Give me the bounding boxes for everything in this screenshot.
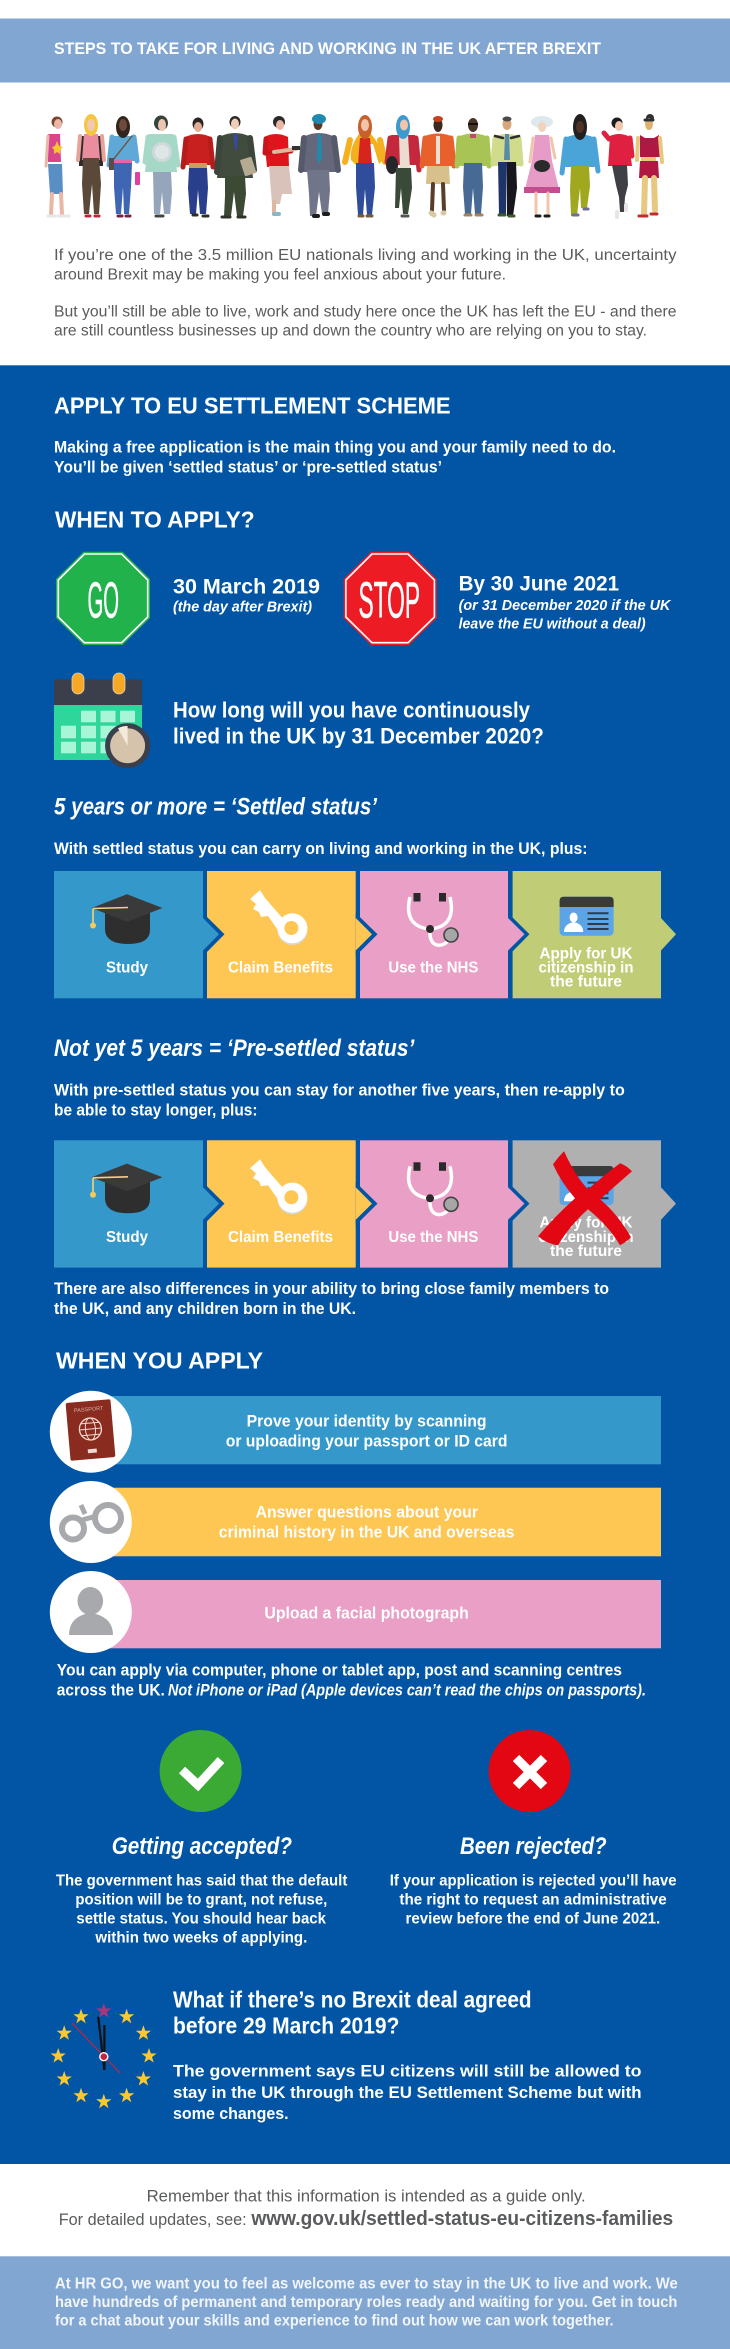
text: how long question [173,697,544,748]
icon: red cross [538,1151,632,1245]
panel: been rejected: If your application is rejected you’ll have [390,1873,677,1890]
text: family differences: There are also differences in your ability to bring close family members to [54,1280,609,1298]
footer banner: have hundreds of permanent and temporary roles ready and waiting for you. Get in touch [55,2294,677,2311]
intro text [54,247,677,340]
text: guide disclaimer: www.gov.uk/settled-status-eu-citizens-families [250,2208,673,2230]
panel: getting accepted: The government has said that the default [56,1873,347,1890]
icon: EU stars clock [51,2003,157,2108]
box: study [54,871,203,998]
step: facial photograph [50,1571,661,1653]
icon: stop sign: STOP [358,571,420,628]
text: pre-settled status intro [54,1081,625,1119]
step: criminal history: criminal history in the UK and overseas [219,1523,514,1541]
heading: no Brexit deal [173,1986,532,2038]
box: claim benefits [203,871,356,998]
heading: apply to EU settlement scheme: APPLY TO EU SETTLEMENT SCHEME [54,392,451,418]
box: claim benefits: Claim Benefits [228,1229,333,1246]
panel: blue main background [0,365,730,2164]
text: how long question: How long will you have continuously [173,697,531,722]
box: citizenship crossed out: citizenship in [538,1229,634,1246]
box: citizenship crossed out [508,1140,676,1268]
heading: pre-settled status: Not yet 5 years = ‘Pre-settled status’ [54,1035,415,1062]
text: pre-settled status intro: be able to stay longer, plus: [54,1101,258,1119]
icon: go sign: GO [88,571,119,628]
icon: calendar with clock [54,673,148,766]
box: use the NHS: Use the NHS [388,960,479,977]
panel: getting accepted: position will be to grant, not refuse, [75,1892,327,1909]
text: no deal explanation: The government says EU citizens will still be allowed to [173,2062,642,2081]
text: how long question: lived in the UK by 31 December 2020? [173,723,544,748]
text: family differences [54,1280,609,1318]
text: settled status intro: With settled status you can carry on living and working in the UK, plus: [54,840,588,858]
intro text: But you’ll still be able to live, work and study here once the UK has left the EU - and there [54,304,676,321]
box: claim benefits [203,1140,356,1268]
text: free application: Making a free application is the main thing you and your family need to do. [54,439,616,457]
text: how to apply: You can apply via computer, phone or tablet app, post and scanning centres [57,1662,622,1680]
text: pre-settled status intro: With pre-settled status you can stay for another five years, then re-apply to [54,1081,625,1099]
text: stop date: By 30 June 2021 [459,572,619,596]
text: how to apply: Not iPhone or iPad (Apple devices can’t read the chips on passports). [168,1682,646,1700]
box: citizenship crossed out: Apply for UK [540,1215,633,1232]
text: guide disclaimer: Remember that this information is intended as a guide only. [147,2188,586,2206]
icon: passport [66,1399,115,1461]
panel: getting accepted: within two weeks of applying. [94,1930,307,1947]
box: claim benefits: Claim Benefits [228,960,333,977]
heading: when to apply: WHEN TO APPLY? [55,507,255,533]
step: facial photograph: Upload a facial photograph [264,1604,469,1622]
text: free application [54,439,616,477]
box: citizenship crossed out: the future [550,1243,622,1260]
box: study: Study [106,960,148,977]
text: go date: (the day after Brexit) [173,599,312,616]
panel: pre-settled status benefits [54,1140,676,1268]
heading: no Brexit deal: before 29 March 2019? [173,2012,399,2038]
panel: been rejected: review before the end of June 2021. [406,1911,660,1928]
text: free application: You’ll be given ‘settled status’ or ‘pre-settled status’ [54,459,442,477]
text: stop date [459,572,672,632]
intro text: around Brexit may be making you feel anxious about your future. [54,266,506,283]
title banner: STEPS TO TAKE FOR LIVING AND WORKING IN THE UK AFTER BREXIT [54,39,602,58]
text: how to apply [57,1662,646,1700]
icon: red cross circle [489,1730,571,1812]
text: no deal explanation: stay in the UK through the EU Settlement Scheme but with [173,2083,642,2102]
box: use the NHS [356,871,508,998]
box: apply for citizenship: Apply for UK [540,945,633,962]
panel: getting accepted: settle status. You should hear back [76,1911,326,1928]
box: use the NHS [356,1140,508,1268]
footer banner [0,2256,730,2349]
text: no deal explanation: some changes. [173,2104,289,2123]
title banner [0,18,730,82]
heading: when you apply: WHEN YOU APPLY [56,1347,263,1373]
panel: getting accepted: Getting accepted? [112,1833,292,1860]
step: prove identity: Prove your identity by scanning [247,1413,487,1431]
panel: been rejected [390,1833,677,1928]
text: go date: 30 March 2019 [173,574,320,598]
illustration: row of diverse people [46,114,662,217]
step: prove identity [50,1391,661,1473]
icon: handcuffs [62,1505,121,1540]
text: guide disclaimer [59,2188,673,2230]
box: study: Study [106,1229,148,1246]
text: guide disclaimer: For detailed updates, see: [59,2211,247,2229]
box: apply for citizenship: the future [550,974,622,991]
heading: settled status: 5 years or more = ‘Settled status’ [54,794,377,821]
box: use the NHS: Use the NHS [388,1229,479,1246]
text: stop date: leave the EU without a deal) [459,615,646,632]
step: criminal history: Answer questions about your [256,1503,479,1521]
box: apply for citizenship [508,871,676,998]
footer banner: for a chat about your skills and experience to find out how we can work together. [55,2312,614,2329]
panel: settled status benefits [54,871,676,998]
icon: person silhouette [69,1587,113,1635]
text: stop date: (or 31 December 2020 if the UK [459,597,672,614]
panel: been rejected: Been rejected? [460,1833,607,1860]
icon: go sign [56,552,150,645]
box: study [54,1140,203,1268]
text: family differences: the UK, and any children born in the UK. [54,1300,356,1318]
text: no deal explanation [173,2062,642,2123]
step: prove identity: or uploading your passport or ID card [226,1433,507,1451]
intro text: are still countless businesses up and down the country who are relying on you to stay. [54,323,647,340]
icon: stop sign [344,552,437,645]
footer banner: At HR GO, we want you to feel as welcome as ever to stay in the UK to live and work. We [55,2275,678,2292]
heading: no Brexit deal: What if there’s no Brexit deal agreed [173,1986,532,2012]
intro text: If you’re one of the 3.5 million EU nationals living and working in the UK, uncertainty [54,247,677,264]
panel: been rejected: the right to request an administrative [399,1892,667,1909]
text: how to apply: across the UK. [57,1682,165,1700]
text: go date [173,574,320,616]
step: criminal history [50,1481,661,1563]
icon: passport: PASSPORT [74,1406,104,1414]
icon: green tick [160,1730,242,1812]
panel: getting accepted [56,1833,347,1947]
box: apply for citizenship: citizenship in [538,960,634,977]
